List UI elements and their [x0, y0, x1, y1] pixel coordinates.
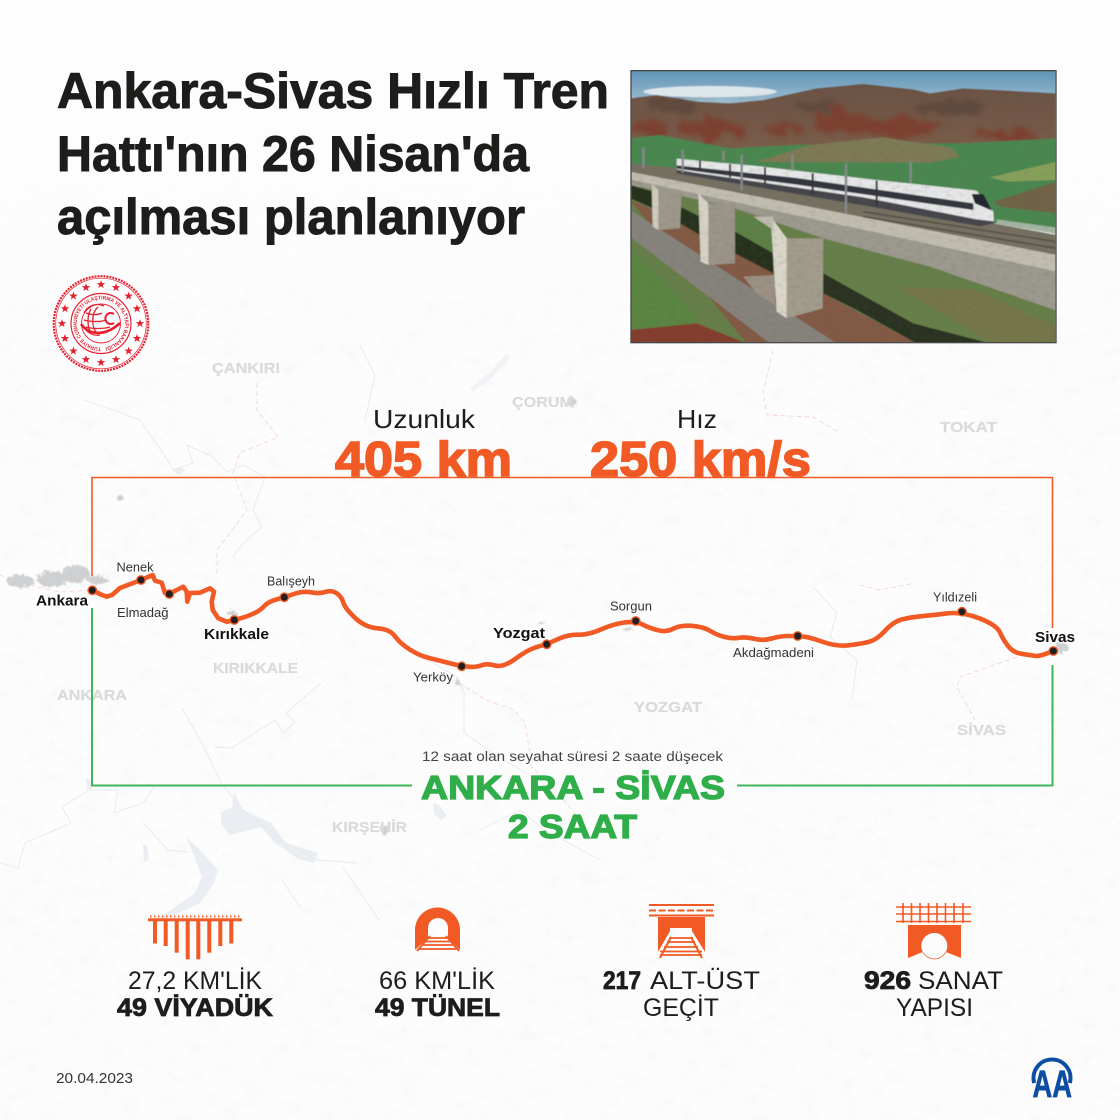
viaduct length: 27,2 KM'LİK: [128, 966, 262, 995]
icon: overpass: [649, 905, 714, 958]
structures label: SANAT: [918, 967, 1003, 995]
overpass label: ALT-ÜST: [650, 967, 760, 995]
travel time headline: 2 SAAT: [508, 808, 637, 845]
province labels: TOKAT: [940, 419, 997, 436]
stat: viaducts: [117, 916, 273, 1022]
title: Ankara-Sivas Hızlı Tren: [57, 63, 609, 119]
meadows: [630, 135, 1057, 230]
province centre labels: [36, 592, 1075, 646]
province centre labels: Yozgat: [493, 625, 545, 642]
count 926: 926: [864, 967, 911, 995]
title: Hattı'nın 26 Nisan'da: [57, 126, 530, 182]
logo: Anadolu Agency: AA: [1032, 1064, 1072, 1106]
left field and road: [632, 249, 696, 330]
travel time note: 12 saat olan seyahat süresi 2 saate düşecek: [422, 749, 723, 764]
emblem: Ministry of Transport and Infrastructure: [52, 275, 150, 372]
title: açılması planlanıyor: [57, 189, 525, 245]
province labels: [57, 360, 1006, 836]
globe with crescent: [81, 305, 120, 335]
station labels: Balışeyh: [267, 574, 315, 589]
lower ground: [630, 183, 1057, 343]
station labels: Yıldızeli: [933, 590, 977, 605]
piers: [651, 191, 682, 230]
travel time headline: ANKARA - SİVAS: [421, 769, 725, 806]
overpass label second line: GEÇİT: [643, 993, 719, 1022]
province borders: [0, 350, 1017, 823]
icon: tunnel: [415, 908, 460, 951]
province labels: SİVAS: [957, 722, 1006, 739]
province centre labels: Ankara: [36, 592, 89, 610]
title: [57, 63, 609, 245]
province labels: KIRIKKALE: [213, 660, 298, 677]
icon: arch bridge: [896, 903, 971, 959]
photo: high-speed train on viaduct: [630, 70, 1057, 343]
tunnel length: 66 KM'LİK: [379, 966, 495, 995]
station labels: Yerköy: [413, 670, 453, 685]
train: [677, 159, 994, 226]
travel time headline: [421, 769, 725, 845]
province centre labels: Kırıkkale: [204, 626, 269, 643]
speed value: 250 km/s: [590, 433, 811, 487]
logo: Anadolu Agency: [1032, 1059, 1072, 1106]
province labels: YOZGAT: [634, 699, 702, 716]
catenary poles: [643, 147, 911, 214]
parapet: [630, 170, 1057, 272]
viaduct count: 49 VİYADÜK: [117, 993, 273, 1022]
fence: [997, 219, 1057, 234]
count 217: 217: [603, 967, 641, 995]
ministry name ring text: TÜRKİYE CUMHURİYETİ ULAŞTIRMA VE ALTYAPI BAKANLIĞI: [73, 296, 129, 352]
speed label: Hız: [677, 404, 717, 434]
stat: overpasses and underpasses: [603, 905, 760, 1022]
station labels: [116, 560, 977, 685]
track bed: [630, 163, 1057, 255]
stat: engineering structures: [864, 903, 1003, 1022]
province labels: ANKARA: [57, 687, 127, 704]
stat: tunnels: [375, 908, 500, 1022]
station labels: Nenek: [116, 560, 154, 575]
station labels: Sorgun: [610, 599, 652, 614]
rivers and district lines: [0, 345, 857, 920]
length value: 405 km: [335, 433, 512, 487]
map background: [0, 272, 1120, 1120]
station labels: Elmadağ: [117, 605, 168, 620]
length label: Uzunluk: [373, 404, 476, 434]
city areas: [6, 397, 1069, 835]
province labels: KIRŞEHİR: [332, 819, 407, 836]
stars: [58, 280, 144, 366]
lakes: [86, 353, 510, 925]
station labels: Akdağmadeni: [733, 645, 814, 660]
province labels: ÇORUM: [512, 394, 573, 411]
hills: [632, 84, 1056, 150]
stations: [88, 576, 1058, 670]
province centre labels: Sivas: [1035, 629, 1075, 646]
structures label second line: YAPISI: [896, 994, 973, 1022]
bridge beam: [630, 177, 1057, 311]
route frame: [92, 478, 1052, 786]
shadow of the viaduct: [632, 185, 652, 208]
province labels: ÇANKIRI: [212, 360, 280, 377]
tunnel count: 49 TÜNEL: [375, 993, 500, 1022]
icon: viaduct: [148, 916, 242, 959]
sky: [632, 71, 1056, 104]
date: 20.04.2023: [56, 1071, 133, 1087]
railway route line: [88, 575, 1058, 670]
